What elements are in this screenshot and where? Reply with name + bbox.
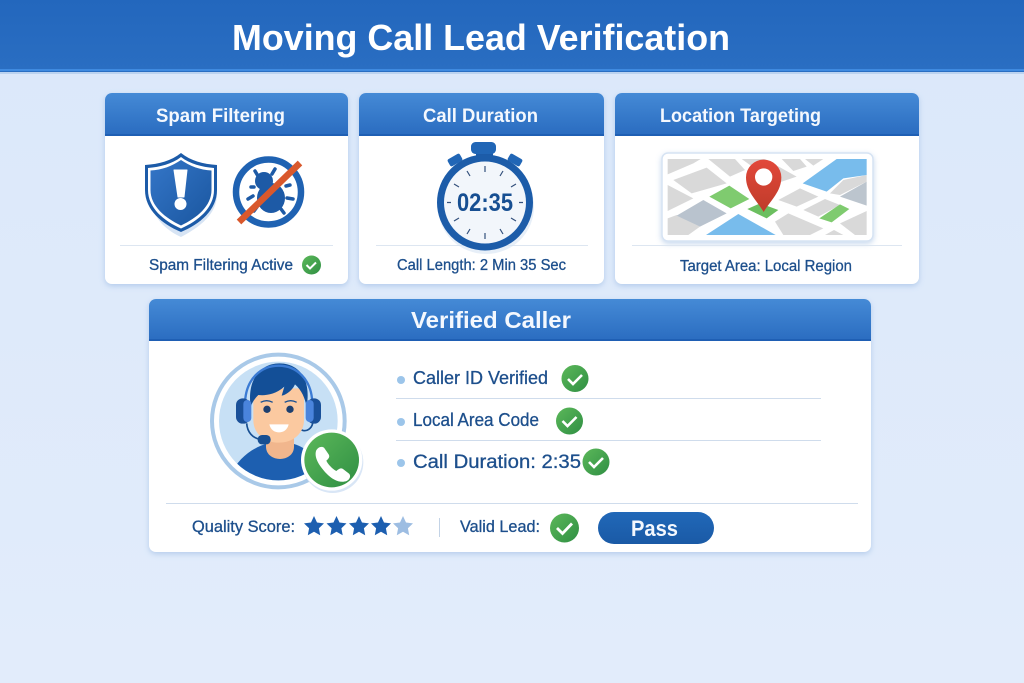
icon: shield with exclamation mark (145, 153, 217, 237)
quality score label: Quality Score: (192, 518, 295, 536)
map with location pin (662, 153, 873, 241)
icon: phone badge (301, 429, 363, 493)
icon: valid check (550, 514, 579, 542)
title: Moving Call Lead Verification (232, 17, 730, 58)
stopwatch time: 02:35 (457, 189, 513, 217)
panel: location targeting (615, 93, 919, 284)
status: spam filtering active: Spam Filtering Active (149, 257, 293, 274)
heading: call duration: Call Duration (423, 106, 538, 127)
heading: spam filtering: Spam Filtering (156, 106, 285, 127)
heading: verified caller: Verified Caller (411, 307, 571, 333)
panel: verified caller (149, 299, 871, 552)
panel: call duration (359, 93, 604, 284)
rating stars (304, 516, 413, 535)
checklist: call duration (397, 448, 610, 476)
pass badge: Pass (631, 516, 678, 541)
valid lead label: Valid Lead: (460, 518, 540, 536)
icon: location pin (746, 160, 781, 212)
status: target area: Target Area: Local Region (680, 258, 852, 275)
status: call length: Call Length: 2 Min 35 Sec (397, 257, 566, 274)
avatar with phone badge (212, 355, 363, 493)
checklist: local area code (397, 408, 583, 434)
panel: spam filtering (105, 93, 348, 284)
title banner (0, 0, 1024, 74)
checklist: caller id verified: Caller ID Verified (413, 367, 548, 388)
icon: crossed out bug (236, 160, 301, 224)
icon: stopwatch (438, 142, 534, 254)
checklist: caller id verified (397, 365, 588, 392)
heading: location targeting: Location Targeting (660, 106, 821, 127)
checklist: call duration: Call Duration: 2:35 (413, 452, 581, 473)
pass badge (598, 512, 714, 544)
checklist: local area code: Local Area Code (413, 409, 539, 430)
icon: check (302, 256, 321, 274)
